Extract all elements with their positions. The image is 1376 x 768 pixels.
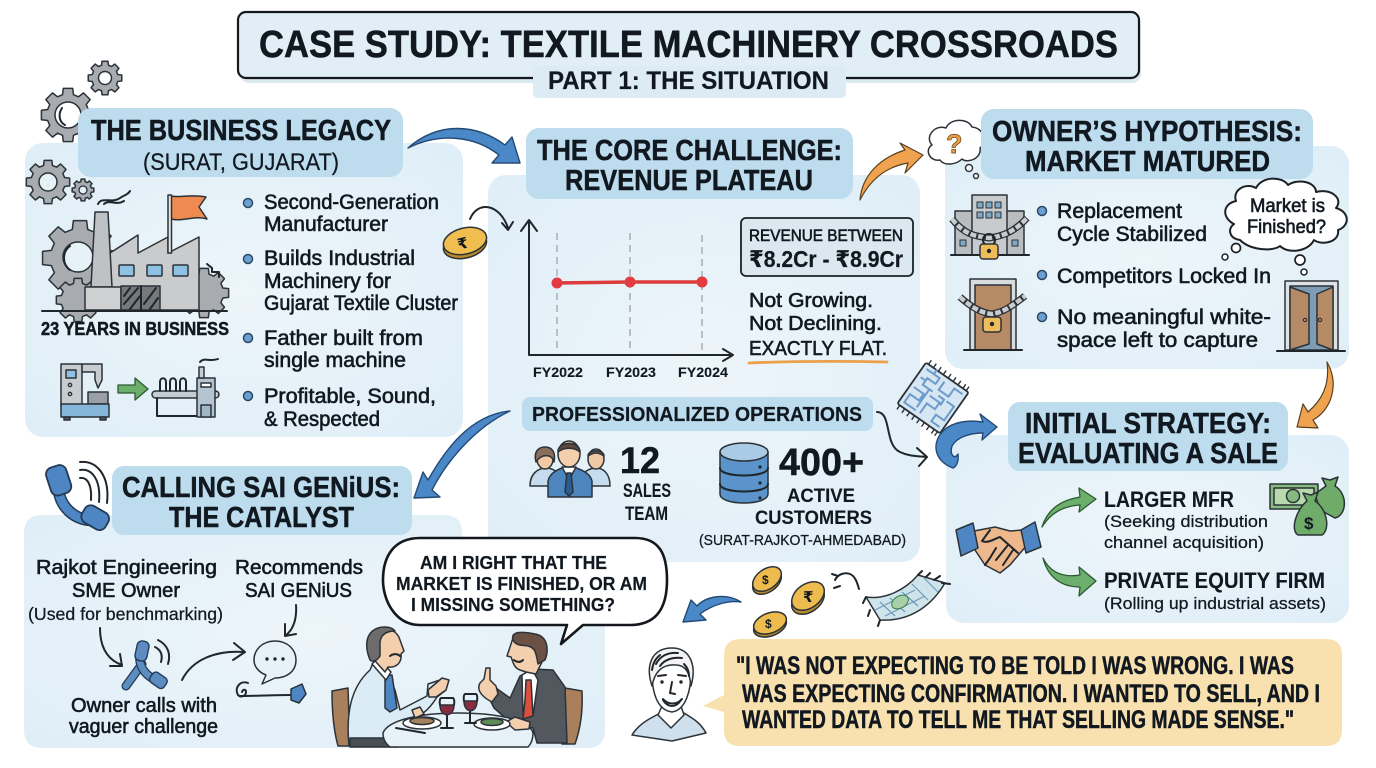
title banner (238, 12, 1141, 83)
heading: calling sai genius: CALLING SAI GENiUS: (122, 472, 400, 504)
text: exactly flat: Not Growing. (749, 289, 873, 312)
icon: small phone (126, 640, 169, 690)
callout: market is finished thought cloud: Market is (1250, 196, 1325, 217)
list: legacy bullets: & Respected (264, 408, 380, 431)
callout: market is finished thought cloud (1222, 179, 1347, 275)
icon: falling coins: ₹ (803, 589, 813, 606)
text: recommends sai genius (235, 556, 363, 602)
heading: business legacy: (SURAT, GUJARAT) (143, 149, 339, 176)
text: rajkot engineering sme owner: SME Owner (72, 579, 180, 602)
icon: rupee coin (441, 207, 513, 263)
text: owner calls: Owner calls with (71, 694, 217, 717)
heading: professionalized operations: PROFESSIONALIZED OPERATIONS (532, 403, 862, 426)
list: hypothesis bullets: No meaningful white- (1057, 306, 1271, 329)
text: larger manufacturer (1104, 487, 1268, 552)
chart: flat revenue: FY2022 (533, 364, 583, 380)
text: exactly flat: EXACTLY FLAT. (749, 337, 887, 360)
icon: single machine to production line (61, 359, 219, 420)
arrow: core challenge to calling (414, 411, 510, 498)
icon: money bags: $ (1304, 514, 1314, 533)
list: legacy bullets: Builds Industrial (264, 247, 415, 270)
icon: telephone (44, 462, 112, 533)
list: hypothesis bullets: Cycle Stabilized (1057, 223, 1207, 246)
text: exactly flat (749, 289, 887, 363)
icon: locked building (951, 195, 1029, 259)
heading: initial strategy: EVALUATING A SALE (1018, 438, 1278, 470)
list: legacy bullets: Gujarat Textile Cluster (264, 292, 458, 315)
arrow: owner to phone (100, 628, 122, 666)
icon: header gears (41, 61, 122, 142)
text: rajkot engineering sme owner: (Used for benchmarking) (28, 604, 223, 624)
arrow: to larger manufacturer (1042, 488, 1096, 527)
arrow: curly blue to strategy (936, 414, 997, 468)
callout: am i right speech bubble: AM I RIGHT THAT THE (420, 553, 607, 573)
callout: revenue range: REVENUE BETWEEN (749, 227, 903, 245)
text: recommends sai genius: SAI GENiUS (245, 579, 352, 602)
list: hypothesis bullets: space left to capture (1057, 329, 1258, 352)
arrow: hypothesis to strategy (1297, 362, 1333, 428)
icon: chained door (960, 279, 1025, 350)
heading: professionalized operations (522, 397, 873, 431)
list: legacy bullets (244, 191, 458, 431)
subtitle: PART 1: THE SITUATION (548, 67, 829, 95)
callout: revenue range: ₹8.2Cr - ₹8.9Cr (749, 246, 903, 272)
arrow: phone to chat (182, 643, 245, 680)
list: legacy bullets: Profitable, Sound, (264, 385, 436, 408)
callout: am i right speech bubble: MARKET IS FINISHED, OR AM (396, 574, 647, 594)
icon: small gears (26, 160, 94, 204)
text: private equity firm: (Rolling up industrial assets) (1104, 594, 1326, 613)
text: private equity firm (1104, 568, 1326, 613)
heading: calling sai genius (112, 466, 412, 535)
arrow: legacy to core challenge (408, 128, 520, 163)
text: rajkot engineering sme owner (28, 556, 223, 624)
icon: open door (1277, 281, 1345, 351)
callout: am i right speech bubble (383, 538, 667, 644)
heading: initial strategy: INITIAL STRATEGY: (1025, 408, 1271, 440)
title banner: CASE STUDY: TEXTILE MACHINERY CROSSROADS (259, 24, 1118, 66)
heading: business legacy: THE BUSINESS LEGACY (91, 115, 391, 147)
icon: database (720, 443, 768, 503)
stat: 400+ active customers: ACTIVE (787, 486, 855, 507)
panel: core challenge (441, 128, 920, 562)
icon: owner portrait (632, 648, 706, 741)
icon: handshake (956, 522, 1041, 573)
icon: money bags (1270, 477, 1344, 535)
text: owner calls: vaguer challenge (69, 715, 218, 738)
arrow: recommends to chat (285, 605, 296, 636)
heading: business legacy (78, 108, 403, 177)
stat: 400+ active customers: (SURAT-RAJKOT-AHMEDABAD) (699, 533, 906, 549)
panel: owner's hypothesis (928, 109, 1349, 369)
chart: flat revenue: FY2023 (606, 364, 656, 380)
icon: banknote fabric (863, 571, 950, 626)
arrow: coins to owner (683, 596, 741, 622)
heading: owner's hypothesis: OWNER’S HYPOTHESIS: (992, 116, 1302, 148)
list: legacy bullets: Father built from (264, 327, 423, 350)
icon: falling coins: $ (762, 573, 769, 587)
icon: falling coins: $ (765, 617, 772, 631)
panel: initial strategy (946, 402, 1349, 623)
illustration: two men at dinner (332, 627, 582, 747)
icon: circuit chip fabric (894, 359, 972, 437)
stat: 400+ active customers: 400+ (779, 442, 864, 484)
heading: core challenge: REVENUE PLATEAU (565, 165, 813, 197)
text: exactly flat: Not Declining. (749, 312, 882, 335)
text: larger manufacturer: channel acquisition) (1104, 533, 1264, 552)
text: recommends sai genius: Recommends (235, 556, 363, 579)
arrow: operations squiggle (877, 412, 927, 466)
stat: 400+ active customers (699, 442, 906, 549)
heading: owner's hypothesis: MARKET MATURED (1025, 146, 1270, 178)
icon: chat bubble and call cord (237, 641, 306, 703)
stat: 12 sales team: 12 (620, 440, 660, 481)
arrow: core challenge to hypothesis (860, 143, 923, 200)
icon: question thought cloud (928, 120, 984, 178)
list: hypothesis bullets: Competitors Locked In (1057, 265, 1271, 288)
list: legacy bullets: Manufacturer (264, 213, 388, 236)
heading: core challenge (526, 128, 853, 199)
heading: core challenge: THE CORE CHALLENGE: (537, 135, 842, 167)
text: larger manufacturer: LARGER MFR (1104, 487, 1234, 512)
text: larger manufacturer: (Seeking distribution (1104, 512, 1268, 531)
list: legacy bullets: single machine (264, 349, 406, 372)
heading: calling sai genius: THE CATALYST (169, 502, 354, 534)
heading: owner's hypothesis (981, 109, 1313, 179)
panel: business legacy (25, 61, 463, 437)
icon: rupee coin: ₹ (456, 235, 470, 254)
callout: revenue range (741, 218, 913, 276)
list: hypothesis bullets (1038, 200, 1271, 352)
panel: calling sai genius (24, 462, 667, 748)
text: rajkot engineering sme owner: Rajkot Engineering (36, 556, 217, 579)
icon: falling coins (748, 562, 859, 641)
text: private equity firm: PRIVATE EQUITY FIRM (1104, 568, 1325, 593)
list: hypothesis bullets: Replacement (1057, 200, 1182, 223)
arrow: to private equity (1043, 558, 1096, 596)
stat: 12 sales team (620, 440, 671, 525)
heading: initial strategy (1008, 402, 1288, 471)
list: legacy bullets: Second-Generation (264, 191, 439, 214)
label: years in business: 23 YEARS IN BUSINESS (41, 318, 229, 339)
icon: sales team (530, 441, 610, 497)
list: legacy bullets: Machinery for (264, 270, 391, 293)
stat: 12 sales team: TEAM (625, 504, 668, 525)
quote box (703, 639, 1342, 746)
icon: factory (42, 191, 229, 322)
stat: 12 sales team: SALES (623, 481, 671, 502)
chart: flat revenue (521, 220, 733, 380)
text: owner calls (69, 694, 218, 738)
callout: am i right speech bubble: I MISSING SOMETHING? (411, 595, 615, 615)
chart: flat revenue: FY2024 (678, 364, 728, 380)
callout: market is finished thought cloud: Finished? (1247, 217, 1326, 238)
icon: question thought cloud: ? (946, 129, 962, 159)
stat: 400+ active customers: CUSTOMERS (755, 508, 872, 529)
